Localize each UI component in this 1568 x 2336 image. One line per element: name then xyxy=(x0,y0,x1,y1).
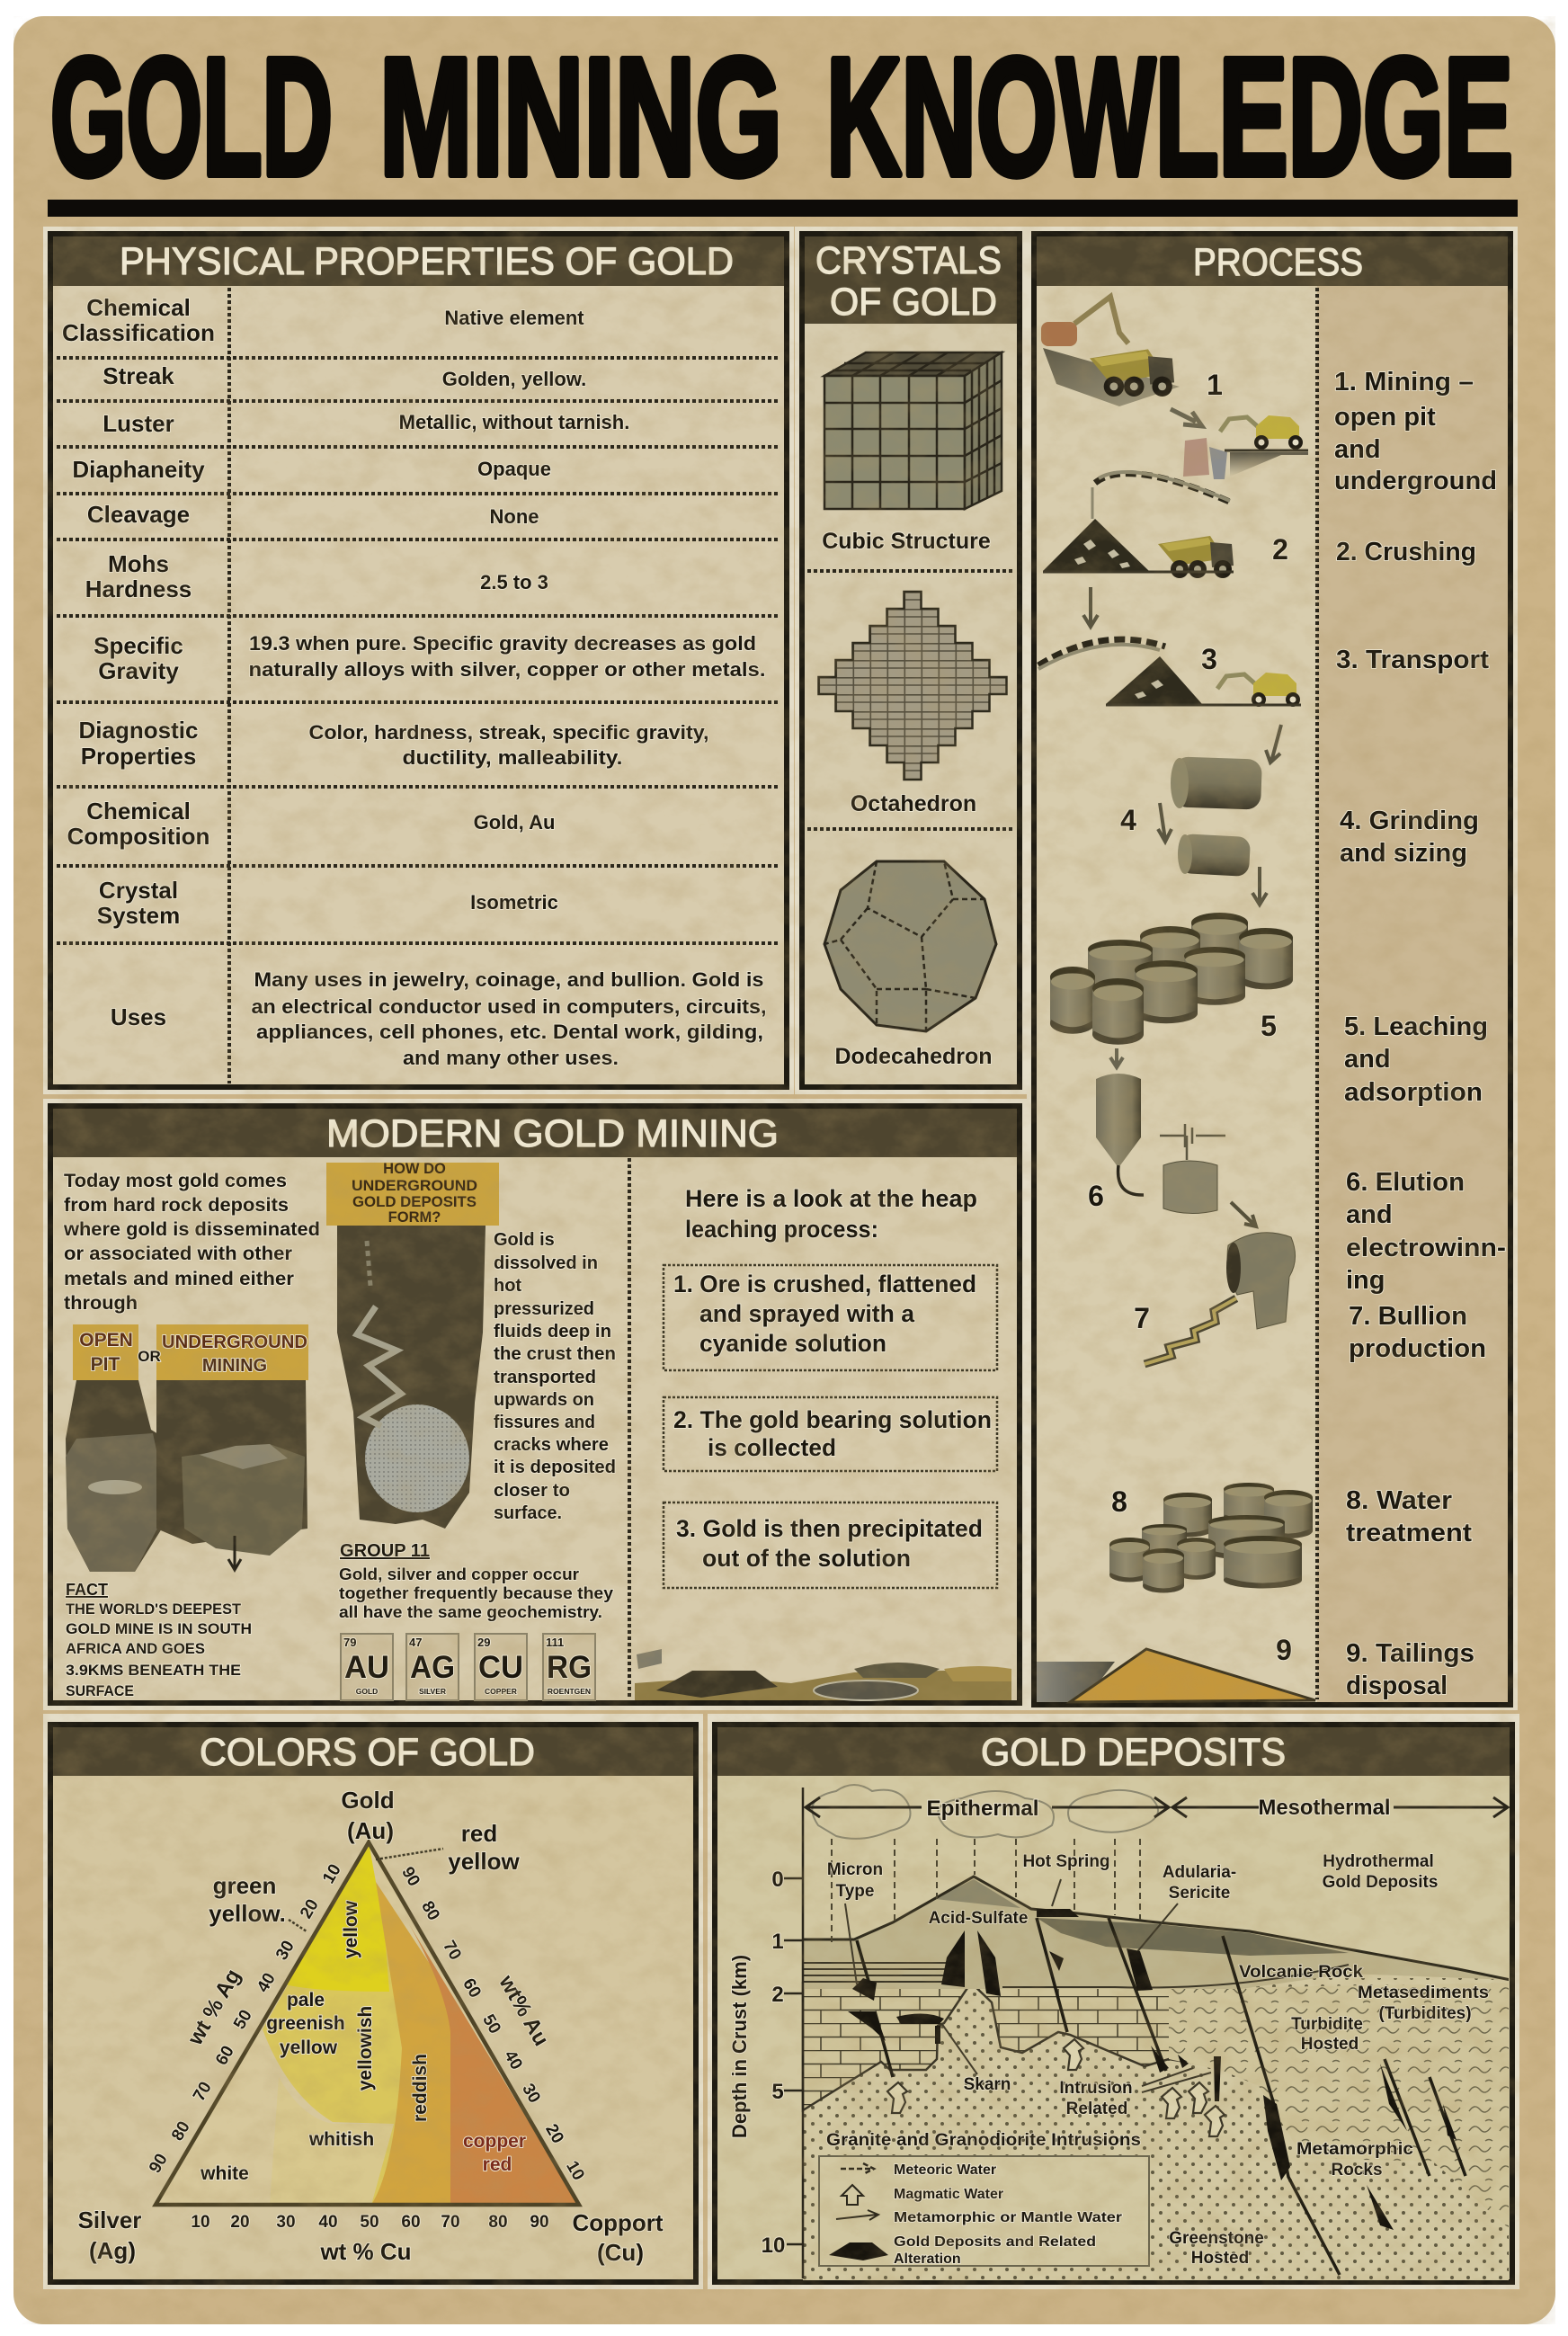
deposit labels: Adularia- xyxy=(1163,1863,1236,1882)
legend: Magmatic Water xyxy=(894,2187,1003,2202)
region: whitish xyxy=(270,2077,394,2205)
bottom scale xyxy=(191,2213,549,2232)
deposit labels: Micron xyxy=(827,1860,883,1879)
right scale: wt% Au xyxy=(494,1970,554,2050)
depth axis: 5 xyxy=(771,2080,784,2104)
intro text: or associated with other xyxy=(64,1244,292,1264)
step 6 illustration: elution and electrowinning xyxy=(1096,1048,1256,1226)
panel: gold deposits xyxy=(708,1714,1519,2289)
chart: ternary gold colour diagram xyxy=(78,1787,664,2266)
step numbers: 5 xyxy=(1261,1010,1277,1042)
gold formation text: transported xyxy=(494,1368,596,1387)
element tiles: AU xyxy=(344,1650,389,1685)
geology: granite base xyxy=(803,1978,1513,2284)
step labels: 7. Bullion xyxy=(1349,1302,1467,1331)
row: uses: appliances, cell phones, etc. Dental work, gilding, xyxy=(256,1021,763,1043)
corner labels: yellow. xyxy=(209,1900,286,1927)
heap leaching step 2 xyxy=(664,1397,997,1471)
region labels: greenish xyxy=(266,2013,345,2034)
step numbers: 4 xyxy=(1120,804,1136,836)
deposit labels: Hot Spring xyxy=(1022,1852,1110,1871)
mesothermal range arrow xyxy=(1172,1796,1508,1820)
row: luster xyxy=(102,410,629,437)
gold formation text xyxy=(494,1230,616,1523)
corner labels: wt % Cu xyxy=(319,2238,412,2265)
clouds xyxy=(812,1785,1158,1839)
heap leaching step 3: out of the solution xyxy=(702,1545,911,1572)
depth axis: 10 xyxy=(762,2233,785,2258)
step 8 illustration: water treatment tanks xyxy=(1109,1483,1313,1593)
illustration: how gold deposits form: HOW DO xyxy=(383,1161,446,1177)
element tiles: 111 xyxy=(546,1636,564,1649)
row: diagnostic properties: Color, hardness, streak, specific gravity, xyxy=(309,721,708,744)
bottom scale: 60 xyxy=(401,2213,421,2232)
step numbers: 2 xyxy=(1272,533,1288,566)
geology: limestone bricks right xyxy=(976,1989,1196,2068)
row: chemical composition: Gold, Au xyxy=(474,811,555,834)
right scale: 20 xyxy=(541,2121,567,2147)
gold formation text: fluids deep in xyxy=(494,1322,611,1342)
title: MINING xyxy=(379,24,782,210)
right scale: 50 xyxy=(478,2011,504,2037)
fact text: 3.9KMS BENEATH THE xyxy=(66,1662,241,1679)
group 11 text: together frequently because they xyxy=(339,1584,613,1602)
element tiles: COPPER xyxy=(485,1687,517,1696)
triangle outline xyxy=(156,1842,579,2205)
right scale: 90 xyxy=(397,1864,423,1890)
row: mohs hardness xyxy=(85,550,548,602)
step labels: and xyxy=(1334,435,1381,464)
row: crystal system xyxy=(97,877,558,929)
right scale: 30 xyxy=(518,2081,544,2107)
right scale xyxy=(397,1864,588,2184)
deposit labels: Gold Deposits xyxy=(1323,1873,1438,1892)
legend: Alteration xyxy=(894,2251,961,2267)
group 11 text: Gold, silver and copper occur xyxy=(339,1565,579,1583)
left scale: 90 xyxy=(146,2151,172,2177)
row: mohs hardness: Mohs xyxy=(108,550,169,577)
corner labels: red xyxy=(461,1820,497,1847)
corner labels: (Ag) xyxy=(89,2237,136,2264)
step 5 illustration: leaching tanks xyxy=(1050,913,1293,1045)
row: crystal system: Isometric xyxy=(470,891,558,914)
gold deposit lenses xyxy=(848,1909,1457,2230)
heading: gold deposits: GOLD DEPOSITS xyxy=(981,1731,1286,1774)
gold formation text: closer to xyxy=(494,1481,570,1501)
row: specific gravity xyxy=(94,632,766,684)
heap leaching step 3 xyxy=(664,1502,997,1588)
step labels: 8. Water xyxy=(1346,1486,1452,1515)
step numbers: 8 xyxy=(1111,1485,1127,1518)
left scale: 40 xyxy=(254,1970,280,1996)
step labels: 1. Mining – xyxy=(1334,368,1474,397)
legend: Meteoric Water xyxy=(894,2162,996,2178)
step labels: 5. Leaching xyxy=(1344,1012,1488,1041)
heap leaching step 1: cyanide solution xyxy=(699,1330,886,1357)
left scale: 20 xyxy=(297,1896,323,1922)
geology: limestone bricks left xyxy=(803,1983,971,2110)
group 11 text: all have the same geochemistry. xyxy=(339,1603,602,1621)
icon: dodecahedron xyxy=(824,861,996,1031)
row: diaphaneity: Diaphaneity xyxy=(72,456,205,483)
step 2 illustration: crushing xyxy=(1043,519,1234,578)
step numbers: 3 xyxy=(1201,643,1217,675)
bottom scale: 10 xyxy=(191,2213,210,2232)
bottom scale: 80 xyxy=(488,2213,508,2232)
element tiles: GOLD xyxy=(356,1687,378,1696)
legend: Gold Deposits and Related xyxy=(894,2234,1096,2250)
epithermal range arrow xyxy=(806,1797,1169,1821)
step labels: 2. Crushing xyxy=(1336,538,1476,566)
corner labels: Gold xyxy=(341,1787,395,1814)
step labels: underground xyxy=(1334,467,1497,495)
step labels: and xyxy=(1346,1200,1393,1229)
step labels: electrowinn- xyxy=(1346,1234,1506,1262)
illustration: underground mining xyxy=(156,1324,308,1570)
fact text: THE WORLD'S DEEPEST xyxy=(66,1601,241,1618)
gold formation text: dissolved in xyxy=(494,1253,598,1273)
intro text xyxy=(63,1171,320,1314)
element tiles: 47 xyxy=(409,1636,422,1649)
illustration: open pit: OPEN xyxy=(79,1330,133,1351)
row: uses: Many uses in jewelry, coinage, and bullion. Gold is xyxy=(254,968,764,991)
bottom scale: 20 xyxy=(230,2213,250,2232)
panel: process xyxy=(1027,227,1518,1710)
step labels: 6. Elution xyxy=(1346,1168,1465,1197)
heading: physical properties: PHYSICAL PROPERTIES OF GOLD xyxy=(120,240,734,283)
deposit labels: Turbidite xyxy=(1291,2015,1363,2034)
row: streak: Golden, yellow. xyxy=(442,368,586,390)
step 3 illustration: transport xyxy=(1038,639,1301,707)
row: diagnostic properties: Properties xyxy=(81,743,196,770)
region labels: white xyxy=(200,2163,249,2184)
region labels: copper xyxy=(463,2131,526,2152)
left scale: 50 xyxy=(230,2007,256,2033)
heading: process: PROCESS xyxy=(1193,241,1363,284)
row: diagnostic properties xyxy=(79,717,708,770)
region labels: yellowish xyxy=(355,2006,376,2091)
step labels: disposal xyxy=(1346,1672,1448,1700)
row: chemical classification: Classification xyxy=(62,319,215,346)
deposit labels: Metasediments xyxy=(1358,1984,1489,2002)
element tiles: 79 xyxy=(343,1636,356,1649)
row: cleavage: None xyxy=(489,505,539,528)
row: crystal system: Crystal xyxy=(99,877,178,904)
step numbers: 7 xyxy=(1134,1302,1150,1334)
element tiles: ROENTGEN xyxy=(548,1687,591,1696)
step labels: production xyxy=(1349,1334,1486,1363)
deposit labels xyxy=(826,1852,1489,2268)
step 4 illustration: grinding mills xyxy=(1158,756,1267,905)
row: crystal system: System xyxy=(97,902,180,929)
depth axis: Depth in Crust (km) xyxy=(728,1955,751,2138)
intro text: metals and mined either xyxy=(64,1269,294,1289)
label: or: OR xyxy=(138,1348,161,1365)
step labels xyxy=(1334,368,1506,1700)
row: uses: and many other uses. xyxy=(403,1047,619,1069)
row: streak xyxy=(102,362,586,390)
row: diaphaneity: Opaque xyxy=(477,458,551,480)
region labels: red xyxy=(483,2154,512,2175)
step labels: ing xyxy=(1346,1266,1385,1295)
faults xyxy=(857,1918,1466,2275)
label: dodecahedron: Dodecahedron xyxy=(834,1044,993,1069)
right scale: 40 xyxy=(500,2047,526,2073)
chart: deposit cross-section xyxy=(803,1785,1513,2284)
row: uses: an electrical conductor used in computers, circuits, xyxy=(252,995,766,1018)
illustration: underground mining: UNDERGROUND xyxy=(162,1333,307,1352)
illustration: how gold deposits form xyxy=(326,1161,499,1529)
gold formation text: fissures and xyxy=(494,1413,595,1432)
step 1 illustration: mining xyxy=(1041,297,1308,519)
gold formation text: surface. xyxy=(494,1503,562,1523)
corner labels: Copport xyxy=(572,2209,664,2236)
region: yellow xyxy=(285,1842,389,1992)
depth axis: 2 xyxy=(771,1983,784,2007)
deposit labels: Greenstone xyxy=(1169,2229,1264,2248)
row: uses: Uses xyxy=(111,1003,166,1030)
intro text: where gold is disseminated xyxy=(63,1219,320,1240)
element tiles: SILVER xyxy=(419,1687,446,1696)
heap leaching step 1 xyxy=(664,1265,997,1370)
region labels: yellow xyxy=(280,2037,338,2058)
deposit labels: Type xyxy=(836,1882,874,1901)
step 7 illustration: bullion furnace xyxy=(1145,1233,1296,1364)
deposit labels: Granite and Granodiorite Intrusions xyxy=(826,2131,1141,2150)
right scale: 60 xyxy=(459,1975,485,2002)
fact text: SURFACE xyxy=(66,1683,134,1699)
gold formation text: the crust then xyxy=(494,1344,616,1364)
region: copper red xyxy=(409,1924,579,2205)
label: octahedron: Octahedron xyxy=(851,791,976,816)
step labels: 9. Tailings xyxy=(1346,1639,1474,1668)
meteoric water arrows xyxy=(832,1839,1140,1942)
bottom scale: 30 xyxy=(276,2213,296,2232)
row: diagnostic properties: ductility, malleability. xyxy=(403,746,622,769)
bottom scale: 40 xyxy=(318,2213,338,2232)
panel: physical properties of gold xyxy=(43,227,794,1094)
left scale: wt % Ag xyxy=(183,1965,245,2050)
fact text: AFRICA AND GOES xyxy=(66,1641,205,1657)
label: cubic structure: Cubic Structure xyxy=(822,529,991,554)
element tiles xyxy=(341,1634,595,1700)
corner labels: Silver xyxy=(78,2207,141,2233)
icon: octahedron xyxy=(818,592,1007,780)
illustration: how gold deposits form: FORM? xyxy=(388,1209,441,1226)
bottom scale: 50 xyxy=(360,2213,379,2232)
row: chemical classification: Chemical xyxy=(86,294,191,321)
heap leaching intro xyxy=(685,1185,977,1243)
row: specific gravity: Gravity xyxy=(98,657,179,684)
deposit labels: Related xyxy=(1066,2100,1127,2118)
region labels: pale xyxy=(287,1990,325,2011)
heading: modern gold mining: MODERN GOLD MINING xyxy=(326,1112,779,1155)
leader lines xyxy=(845,1879,1211,2092)
gold formation text: pressurized xyxy=(494,1299,594,1319)
deposit labels: Skarn xyxy=(964,2075,1011,2094)
region: reddish xyxy=(371,1882,450,2205)
heap leaching step 2: is collected xyxy=(708,1434,836,1461)
deposit labels: Rocks xyxy=(1331,2161,1383,2180)
deposit labels: Metamorphic xyxy=(1296,2140,1413,2159)
illustration: open pit xyxy=(66,1324,165,1572)
illustration: how gold deposits form: GOLD DEPOSITS xyxy=(352,1194,477,1210)
row: uses xyxy=(111,968,766,1069)
corner labels: (Cu) xyxy=(597,2239,644,2266)
region: pale greenish yellow and yellowish xyxy=(263,1842,402,2205)
deposit labels: (Turbidites) xyxy=(1378,2004,1472,2023)
element tiles: RG xyxy=(547,1650,592,1685)
illustration: open pit: PIT xyxy=(91,1354,120,1375)
panel: modern gold mining xyxy=(43,1099,1027,1710)
region labels: whitish xyxy=(308,2129,374,2150)
row: specific gravity: Specific xyxy=(94,632,183,659)
row: chemical composition: Chemical xyxy=(86,798,191,825)
step labels: open pit xyxy=(1334,403,1436,432)
left scale: 80 xyxy=(168,2118,194,2144)
step labels: 4. Grinding xyxy=(1340,807,1479,835)
element tiles: CU xyxy=(478,1650,523,1685)
row: mohs hardness: Hardness xyxy=(85,575,192,602)
right scale: 10 xyxy=(562,2158,588,2184)
deposit labels: Hydrothermal xyxy=(1323,1852,1434,1871)
step numbers xyxy=(1088,369,1292,1666)
geology: metasediments xyxy=(1169,1983,1510,2230)
row: chemical classification xyxy=(62,294,584,346)
magmatic water arrows xyxy=(887,2039,1225,2136)
region labels: reddish xyxy=(410,2054,431,2122)
left scale: 30 xyxy=(272,1938,298,1964)
legend xyxy=(819,2156,1149,2267)
deposit labels: Hosted xyxy=(1301,2035,1359,2054)
region labels xyxy=(200,1900,526,2184)
row: specific gravity: naturally alloys with silver, copper or other metals. xyxy=(248,658,766,681)
heading: colors of gold: COLORS OF GOLD xyxy=(200,1731,535,1774)
row: cleavage: Cleavage xyxy=(87,501,190,528)
bottom scale: 70 xyxy=(441,2213,460,2232)
title rule xyxy=(48,200,1518,217)
row: chemical composition xyxy=(67,798,555,850)
row: chemical classification: Native element xyxy=(444,307,584,329)
illustration: underground mining: MINING xyxy=(202,1356,267,1376)
intro text: Today most gold comes xyxy=(64,1171,287,1191)
surface line xyxy=(803,1877,1510,1980)
step numbers: 9 xyxy=(1276,1634,1292,1666)
title: GOLD xyxy=(50,24,333,210)
row: specific gravity: 19.3 when pure. Specific gravity decreases as gold xyxy=(249,632,756,655)
depth axis xyxy=(728,1788,803,2278)
gold formation text: Gold is xyxy=(494,1230,555,1250)
deposit labels: Hosted xyxy=(1191,2249,1249,2268)
gold formation text: it is deposited xyxy=(494,1458,616,1477)
heading: crystals of gold: CRYSTALS xyxy=(815,239,1002,282)
heap leaching step 1: and sprayed with a xyxy=(699,1300,915,1327)
left scale: 60 xyxy=(212,2043,238,2069)
corner labels: green xyxy=(213,1872,276,1899)
heap leaching step 2: 2. The gold bearing solution xyxy=(673,1406,992,1433)
deposit labels: Volcanic Rock xyxy=(1239,1963,1363,1982)
depth axis: 0 xyxy=(771,1868,784,1892)
bottom scale: 90 xyxy=(530,2213,549,2232)
legend: Metamorphic or Mantle Water xyxy=(894,2210,1122,2225)
step numbers: 1 xyxy=(1207,369,1223,401)
intro text: from hard rock deposits xyxy=(64,1195,289,1216)
title xyxy=(50,24,1513,210)
mesothermal range arrow: Mesothermal xyxy=(1259,1796,1390,1820)
deposit labels: Intrusion xyxy=(1059,2079,1133,2098)
group 11 text xyxy=(339,1541,613,1621)
row: mohs hardness: 2.5 to 3 xyxy=(480,571,548,593)
heading: crystals of gold: OF GOLD xyxy=(830,281,997,324)
row: cleavage xyxy=(87,501,539,528)
gold formation text: cracks where xyxy=(494,1435,609,1455)
gold formation text: upwards on xyxy=(494,1390,594,1410)
right scale: 80 xyxy=(417,1898,443,1924)
heap leaching intro: Here is a look at the heap xyxy=(685,1185,977,1212)
epithermal range arrow: Epithermal xyxy=(926,1797,1039,1821)
fact text: FACT xyxy=(66,1581,108,1599)
heap leaching step 1: 1. Ore is crushed, flattened xyxy=(673,1271,976,1297)
corner labels xyxy=(78,1787,664,2266)
row: streak: Streak xyxy=(102,362,174,389)
heading: crystals of gold xyxy=(815,239,1002,324)
row: chemical composition: Composition xyxy=(67,823,209,850)
region labels: yellow xyxy=(341,1900,361,1958)
panel: crystals of gold xyxy=(795,227,1027,1094)
left scale xyxy=(146,1861,345,2177)
corner labels: (Au) xyxy=(347,1817,394,1844)
deposit labels: Sericite xyxy=(1169,1884,1230,1903)
left scale: 10 xyxy=(319,1861,345,1887)
row: diagnostic properties: Diagnostic xyxy=(79,717,198,744)
step labels: adsorption xyxy=(1344,1078,1483,1107)
group 11 text: GROUP 11 xyxy=(340,1541,430,1561)
step labels: treatment xyxy=(1346,1519,1472,1547)
panel: colors of gold xyxy=(43,1714,703,2289)
row: luster: Metallic, without tarnish. xyxy=(399,411,629,433)
step 9 illustration: tailings xyxy=(1037,1649,1315,1702)
illustration: heap leach landscape xyxy=(635,1649,1011,1700)
arrow: crushing to transport xyxy=(1083,587,1098,627)
step numbers: 6 xyxy=(1088,1180,1104,1212)
heap leaching intro: leaching process: xyxy=(685,1216,878,1243)
row: luster: Luster xyxy=(102,410,174,437)
depth axis: 1 xyxy=(771,1930,784,1954)
row: diaphaneity xyxy=(72,456,551,483)
triangle: white area xyxy=(156,1842,579,2205)
geology: volcanic layers xyxy=(803,1877,1510,1989)
step labels: 3. Transport xyxy=(1336,646,1489,674)
heap leaching step 3: 3. Gold is then precipitated xyxy=(676,1515,983,1542)
corner labels: yellow xyxy=(448,1848,521,1875)
step labels: and xyxy=(1344,1045,1391,1074)
gold formation text: hot xyxy=(494,1276,521,1296)
arrow: transport to grinding xyxy=(1266,725,1281,762)
icon: cubic structure xyxy=(824,352,1002,509)
right scale: 70 xyxy=(439,1938,465,1964)
step labels: and sizing xyxy=(1340,839,1467,868)
left scale: 70 xyxy=(190,2079,216,2105)
element tiles: 29 xyxy=(477,1636,490,1649)
deposit labels: Acid-Sulfate xyxy=(929,1909,1028,1928)
element tiles: AG xyxy=(410,1650,455,1685)
fact text xyxy=(66,1581,252,1699)
intro text: through xyxy=(64,1293,138,1314)
illustration: how gold deposits form: UNDERGROUND xyxy=(352,1178,477,1194)
fact text: GOLD MINE IS IN SOUTH xyxy=(66,1621,252,1637)
